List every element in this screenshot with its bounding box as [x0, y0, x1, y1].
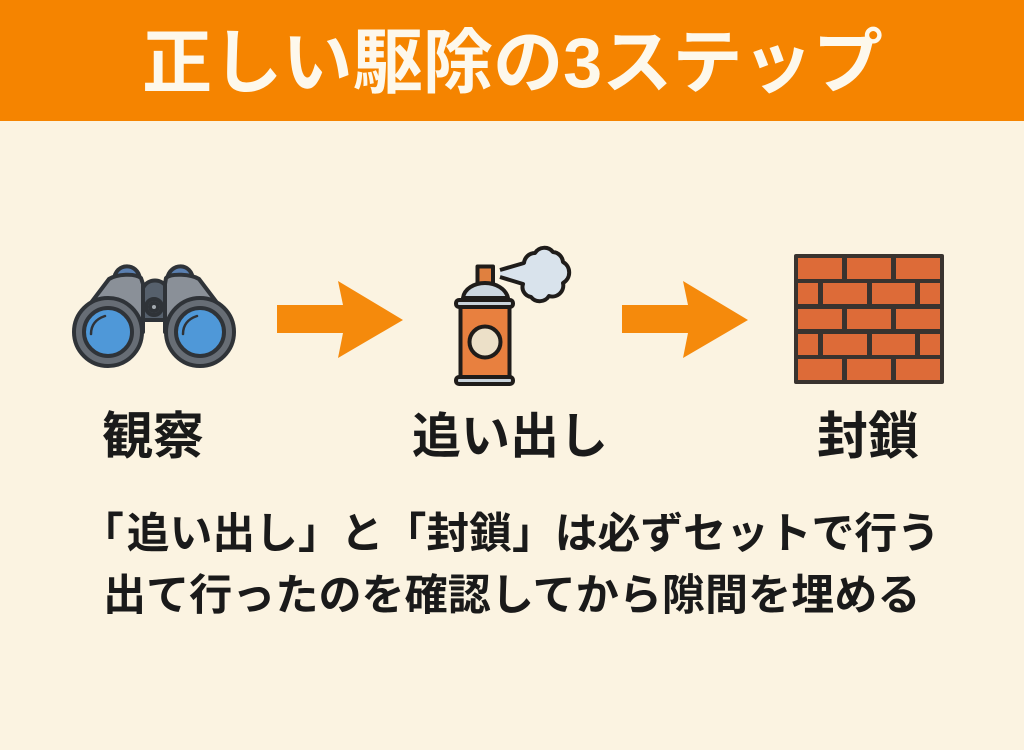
icon: binoculars [74, 266, 234, 366]
title: 正しい駆除の3ステップ [142, 23, 883, 102]
icon: brick wall [794, 254, 944, 384]
message line 1: 「追い出し」と「封鎖」は必ずセットで行う [81, 510, 940, 558]
header band [0, 0, 1024, 121]
icon: spray can [456, 248, 569, 384]
label: seal: 封鎖 [817, 408, 919, 465]
label: chase out: 追い出し [412, 410, 608, 464]
message line 2: 出て行ったのを確認してから隙間を埋める [103, 572, 920, 620]
label: observe: 観察 [102, 408, 204, 465]
arrow: chase to seal [622, 281, 748, 358]
arrow: observe to chase [277, 281, 403, 358]
